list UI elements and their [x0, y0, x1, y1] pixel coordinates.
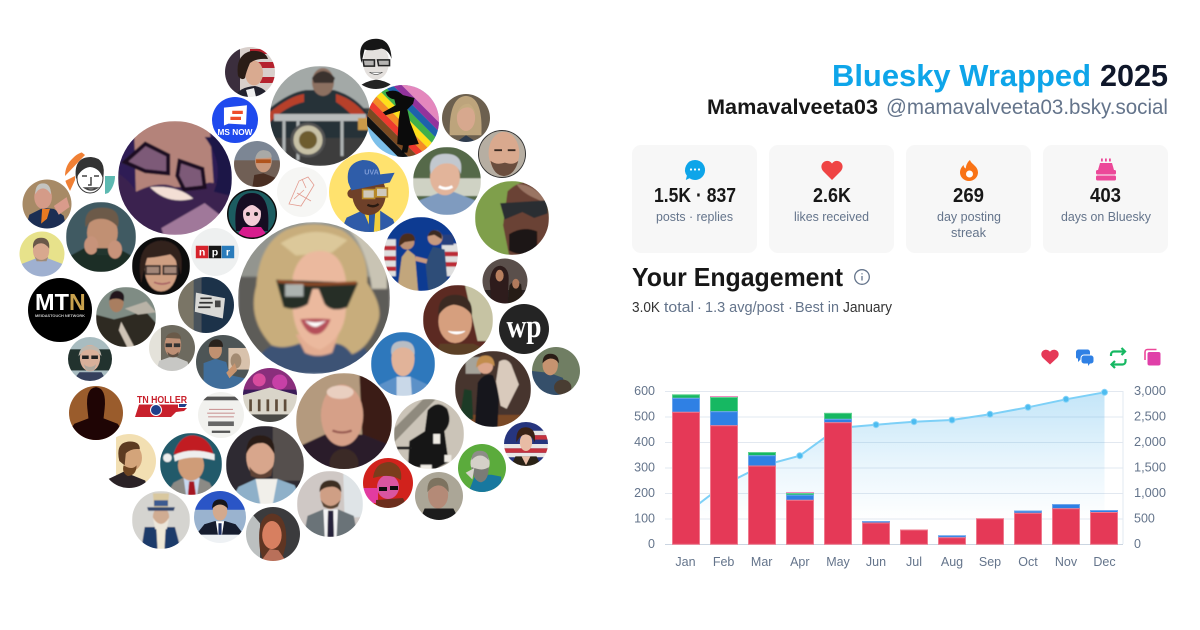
- avatar: bearded man in profile: [102, 434, 156, 488]
- avatar: man in Santa hat: [160, 433, 222, 495]
- stat card: posting streak: day posting: [937, 209, 1001, 224]
- avatar: man with sunglasses street: [234, 141, 280, 187]
- title: Bluesky Wrapped: [832, 58, 1091, 93]
- month labels: Jan: [675, 555, 696, 569]
- engagement summary: ·: [697, 300, 702, 316]
- engagement summary: ·: [788, 300, 793, 316]
- user name and handle: [707, 96, 1168, 119]
- avatar: man in plaid shirt: [20, 232, 64, 276]
- left axis labels: 300: [634, 460, 655, 474]
- bar: April: [786, 492, 814, 544]
- avatar: news anchor: [194, 491, 246, 543]
- month labels: Jun: [866, 555, 886, 569]
- avatar: MS NOW logo: MS NOW: [218, 128, 253, 137]
- engagement summary: total: [664, 300, 694, 316]
- month labels: [675, 555, 1116, 569]
- avatar: poster flyer: [198, 392, 244, 438]
- icon: speech bubble: [685, 160, 705, 180]
- title: 2025: [1100, 58, 1168, 93]
- cumulative area: [686, 392, 1104, 544]
- avatar: NPR logo: r: [226, 246, 230, 258]
- avatar: UVA cap cartoon: UVA: [364, 167, 379, 176]
- icon: heart: [821, 161, 843, 180]
- avatar: rainbow silhouette: [367, 85, 439, 157]
- bar: July: [900, 530, 928, 544]
- avatar: Uncle Sam: [132, 491, 190, 549]
- avatar: NPR logo: p: [212, 246, 219, 258]
- avatar: orange cartoon: [65, 152, 115, 194]
- avatar: woman in sunglasses (largest): [238, 222, 390, 374]
- logo: TN Holler: [135, 394, 187, 417]
- avatar: Washington Post logo: [499, 304, 549, 354]
- icon: flame: [960, 160, 978, 181]
- avatar: woman before flag: [504, 422, 548, 466]
- month labels: Jul: [906, 555, 922, 569]
- avatar: two women vintage: [482, 258, 528, 304]
- left axis labels: 100: [634, 512, 655, 526]
- avatar: man in glasses dark background: [132, 237, 190, 295]
- avatar: man in glasses tee: [149, 325, 195, 371]
- icon: replies bubbles: [1076, 350, 1094, 366]
- left axis labels: 500: [634, 410, 655, 424]
- engagement summary: Best in: [795, 300, 839, 316]
- stat card: days on Bluesky: [1043, 145, 1168, 253]
- avatar: NPR logo: n: [199, 246, 205, 258]
- avatar: grey haired man: [415, 472, 463, 520]
- month labels: Dec: [1093, 555, 1116, 569]
- icon: quotes squares: [1145, 350, 1160, 366]
- avatar: MTN logo: MT: [35, 289, 69, 315]
- avatar: smiling man in car: [423, 285, 493, 355]
- bar: August: [938, 536, 966, 544]
- engagement summary: 3.0K: [632, 300, 660, 316]
- avatar: MTN logo: N: [69, 289, 86, 315]
- left axis labels: 0: [648, 537, 655, 551]
- engagement summary: January: [843, 300, 893, 316]
- right axis labels: [1134, 384, 1166, 551]
- right axis labels: 1,500: [1134, 460, 1166, 474]
- bar: January: [672, 395, 700, 544]
- avatar: man with hands at chin: [66, 202, 136, 272]
- stat card: posts and replies: posts · replies: [656, 209, 733, 224]
- avatar: blonde woman: [442, 94, 490, 142]
- avatar: man with stubble in blue blazer: [226, 426, 304, 504]
- avatar: man in grey suit: [297, 471, 363, 537]
- bar: September: [976, 519, 1004, 544]
- engagement summary: 1.3 avg/post: [705, 300, 784, 316]
- icon: likes heart: [1041, 350, 1059, 364]
- stat card: posts and replies: 1.5K · 837: [654, 185, 736, 207]
- stat card: likes received: likes received: [794, 209, 869, 224]
- stat card: days on Bluesky: 403: [1090, 185, 1121, 207]
- right axis labels: 2,500: [1134, 410, 1166, 424]
- stat card: likes received: [769, 145, 894, 253]
- bar: October: [1014, 511, 1042, 544]
- avatar: couple greeting by flag: [384, 217, 458, 291]
- bar: November: [1052, 504, 1080, 544]
- avatar: silhouette: [69, 386, 123, 440]
- avatar: MS NOW logo: [212, 97, 258, 143]
- avatar: UVA cap cartoon: [329, 152, 409, 232]
- month labels: Oct: [1018, 555, 1038, 569]
- icon: reposts: [1111, 348, 1126, 368]
- stat card: posts and replies: [632, 145, 757, 253]
- stat card: posting streak: streak: [951, 225, 986, 240]
- stat card: posting streak: 269: [953, 185, 984, 207]
- avatar: bald man with microphone: [296, 373, 392, 478]
- bar: December: [1090, 510, 1118, 544]
- month labels: Nov: [1055, 555, 1078, 569]
- left axis labels: 400: [634, 435, 655, 449]
- bar: June: [862, 522, 890, 544]
- avatar: man lying in dark jacket: [96, 287, 156, 347]
- avatar: man with dark sunglasses: [475, 181, 549, 255]
- user name and handle: @mamavalveeta03.bsky.social: [886, 96, 1168, 119]
- month labels: Apr: [790, 555, 810, 569]
- user name and handle: Mamavalveeta03: [707, 96, 878, 119]
- avatar: black curly dog: [394, 399, 464, 469]
- month labels: Sep: [979, 555, 1001, 569]
- avatar: bald bearded man: [478, 130, 526, 178]
- avatar: White House at night: [243, 368, 297, 422]
- avatar: green bearded cartoon: [458, 444, 506, 492]
- avatar: MTN logo: MEIDASTOUCH NETWORK: [35, 314, 85, 318]
- right axis labels: 500: [1134, 512, 1155, 526]
- month labels: Feb: [713, 555, 734, 569]
- icon: info: [855, 270, 869, 284]
- avatar: older man with sunglasses: [68, 337, 112, 381]
- grid lines: [665, 391, 1123, 544]
- bar: February: [710, 396, 738, 544]
- chart: monthly engagement: [634, 384, 1166, 569]
- bar: May: [824, 413, 852, 544]
- right axis labels: 3,000: [1134, 384, 1166, 398]
- month labels: Mar: [751, 555, 772, 569]
- avatar: smiling man blue background: [371, 332, 435, 396]
- avatar: woman in orange light: [246, 507, 300, 561]
- heading: Your Engagement: Your Engagement: [632, 262, 843, 292]
- avatar: woman holding dog: [455, 351, 531, 427]
- avatar: man in checked shirt: [413, 147, 481, 215]
- left axis labels: [634, 384, 655, 551]
- chart legend: [1041, 348, 1160, 368]
- avatar bubble cluster: [20, 37, 580, 561]
- bar: March: [748, 452, 776, 544]
- avatar: line sketch: [277, 167, 327, 217]
- stat card: posting streak: [906, 145, 1031, 253]
- avatar: biker: [270, 66, 370, 166]
- avatar: moustached man with dog: [532, 347, 580, 395]
- avatar: man with flag: [225, 47, 275, 97]
- avatar: Washington Post logo: wp: [506, 309, 542, 345]
- avatar: man with headset: [196, 335, 250, 389]
- logo: TN Holler: TN HOLLER: [137, 394, 187, 406]
- right axis labels: 2,000: [1134, 435, 1166, 449]
- avatar: pink anime portrait: [227, 189, 277, 239]
- avatar: smiling man with dark glasses: [118, 121, 232, 235]
- avatar: MTN logo: [28, 278, 92, 342]
- avatar: man in navy suit: [22, 180, 72, 228]
- icon: birthday cake: [1096, 158, 1116, 180]
- left axis labels: 200: [634, 486, 655, 500]
- left axis labels: 600: [634, 384, 655, 398]
- engagement summary: [632, 300, 893, 316]
- avatar: NPR logo: [191, 228, 239, 276]
- cumulative line: [686, 392, 1104, 514]
- month labels: May: [826, 555, 851, 569]
- right axis labels: 1,000: [1134, 486, 1166, 500]
- month labels: Aug: [941, 555, 963, 569]
- avatar: red pink sunglasses: [363, 458, 413, 508]
- avatar: sign on post: [178, 277, 234, 333]
- stat card: likes received: 2.6K: [813, 185, 851, 207]
- avatar: black and white man with glasses: [360, 38, 392, 89]
- right axis labels: 0: [1134, 537, 1141, 551]
- stat card: days on Bluesky: days on Bluesky: [1061, 209, 1151, 224]
- line markers: [797, 389, 1108, 459]
